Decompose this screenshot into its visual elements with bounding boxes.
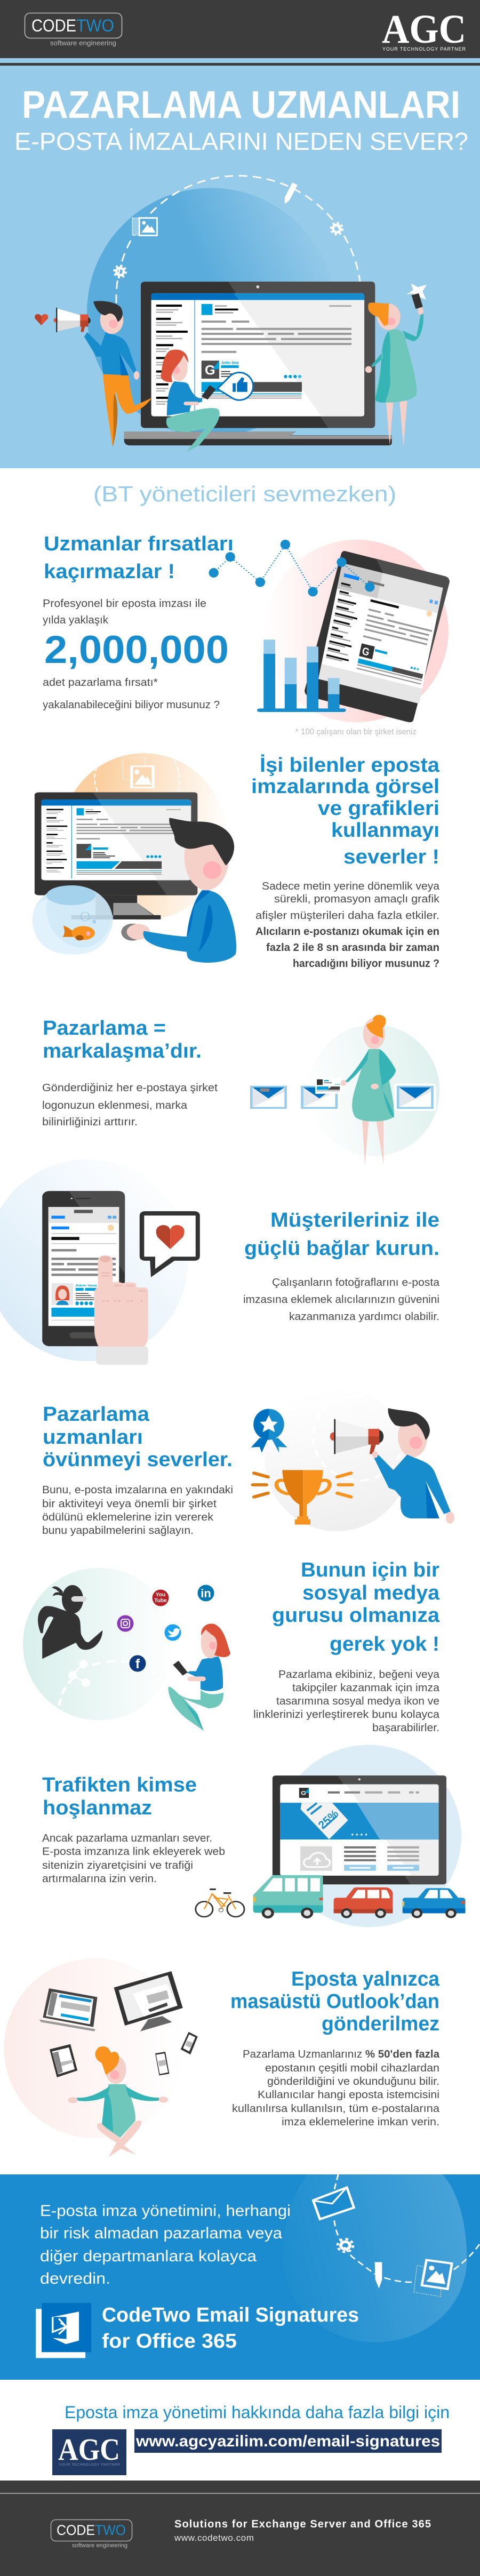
body text <box>42 1833 225 1885</box>
illustration: ninja, social icons, woman <box>23 1568 230 1731</box>
icon: ribbon badge <box>251 1409 287 1453</box>
heading: Pazarlama <box>43 1403 150 1426</box>
panel message: E-posta imza yönetimini, herhangi <box>40 2202 291 2220</box>
monitor <box>273 1775 446 1884</box>
icon: tablet <box>50 2044 77 2077</box>
heading: kullanmayı <box>331 819 439 842</box>
sitting woman <box>161 349 253 452</box>
footer text <box>174 2518 431 2543</box>
panel message: bir risk almadan pazarlama veya <box>40 2225 282 2242</box>
bar chart <box>257 639 346 712</box>
signature block <box>77 844 162 871</box>
heading: gurusu olmanıza <box>272 1604 440 1627</box>
body text <box>43 598 220 711</box>
icon: Instagram <box>117 1615 133 1632</box>
panel message: devredin. <box>40 2270 110 2287</box>
heading: sosyal medya <box>302 1582 440 1604</box>
heading: övünmeyi severler. <box>43 1449 233 1471</box>
woman <box>341 1015 396 1165</box>
icon: gear right <box>331 223 342 235</box>
CodeTwo logo: TWO <box>95 2522 126 2538</box>
tablet <box>305 551 450 722</box>
icon: YouTube <box>153 1589 169 1606</box>
body text: Kullanıcılar hangi eposta istemcisini <box>258 2089 439 2101</box>
heading: Pazarlama = <box>43 1017 166 1039</box>
icon: Facebook: f <box>135 1657 140 1671</box>
heading <box>244 1209 439 1260</box>
icon: Twitter <box>164 1625 181 1641</box>
icon: LinkedIn <box>197 1585 214 1601</box>
icon: gear left <box>114 266 126 277</box>
icon: envelope 2 <box>299 1084 340 1111</box>
icon: trophy <box>253 1470 352 1525</box>
body text: tasarımına sosyal medya ikon ve <box>276 1695 439 1707</box>
AGC box: AGC <box>58 2432 120 2467</box>
heading <box>42 1774 197 1819</box>
icon: goldfish <box>62 925 95 940</box>
panel message: diğer departmanlara kolayca <box>40 2247 257 2265</box>
body text <box>42 1082 218 1128</box>
icon: image <box>123 758 153 787</box>
icon: phone 1 <box>155 2052 169 2075</box>
body text <box>255 881 440 970</box>
body text: logonuzun eklenmesi, marka <box>42 1100 188 1111</box>
heading: ve grafikleri <box>318 797 439 820</box>
illustration: website and vehicles <box>196 1745 465 1927</box>
heading: Bunun için bir <box>301 1559 439 1581</box>
panel message <box>40 2202 291 2287</box>
heading: gerek yok ! <box>330 1633 439 1655</box>
decoration: circle with icons <box>36 2174 480 2358</box>
signature block <box>202 360 302 394</box>
body text <box>232 2049 440 2128</box>
illustration: awards and megaphone <box>251 1387 454 1531</box>
heading: kaçırmazlar ! <box>44 561 175 583</box>
signature card <box>315 1078 342 1094</box>
heading: gönderilmez <box>322 2013 439 2035</box>
body text: Gönderdiğiniz her e-postaya şirket <box>42 1082 218 1094</box>
body text: yakalanabileceğini biliyor musunuz ? <box>43 699 220 711</box>
body text: Alıcıların e-postanızı okumak için en <box>255 926 439 938</box>
signature block: John Doe <box>221 360 239 365</box>
hero panel <box>0 58 480 468</box>
body text: artırmalarına izin verin. <box>42 1873 157 1885</box>
phone <box>42 1191 125 1346</box>
more info line: Eposta imza yönetimi hakkında daha fazla bilgi için <box>65 2403 450 2422</box>
CodeTwo logo: CODE <box>57 2522 95 2538</box>
discount label: 25% <box>316 1807 341 1831</box>
body text: sürekli, promasyon amaçlı grafik <box>274 893 440 905</box>
section: social media <box>23 1559 440 1734</box>
product name <box>102 2304 359 2353</box>
body text: afişler müşterileri daha fazla etkiler. <box>255 910 439 922</box>
body text: başarabilirler. <box>372 1722 439 1734</box>
icon: blue car <box>403 1888 465 1918</box>
body text: Ancak pazarlama uzmanları sever. <box>42 1833 212 1844</box>
body text: fazla 2 ile 8 sn arasında bir zaman <box>266 942 439 954</box>
icon: desktop monitor <box>114 1971 183 2031</box>
URL box: www.agcyazilim.com/email-signatures <box>135 2433 440 2450</box>
heading: güçlü bağlar kurun. <box>244 1237 439 1260</box>
photo signature: Adele Vann <box>76 1284 97 1287</box>
illustration: phone, hand and heart bubble <box>0 1159 200 1365</box>
icon: gear <box>338 2239 353 2252</box>
icon: envelope 3 <box>394 1084 436 1111</box>
section: traffic <box>42 1745 465 1927</box>
speech bubble with heart <box>140 1211 200 1277</box>
icon: heart <box>35 314 48 325</box>
body text: ödülünü eklemelerine izin vererek <box>42 1511 214 1523</box>
heading: masaüstü Outlook’dan <box>230 1990 439 2013</box>
body text: epostanın çeşitli mobil cihazlardan <box>265 2062 439 2074</box>
CodeTwo logo <box>51 2519 132 2549</box>
body text: takipçiler kazanmak için imza <box>292 1682 440 1694</box>
header bar <box>0 0 480 58</box>
body text: Bunu, e-posta imzalarına en yakındaki <box>42 1484 233 1496</box>
big number: 2,000,000 <box>44 628 229 671</box>
heading <box>43 1017 202 1062</box>
heading <box>230 1968 440 2035</box>
footer <box>0 2481 480 2576</box>
body text: bilinirliğinizi arttırır. <box>42 1116 138 1128</box>
AGC logo: AGC <box>382 7 466 52</box>
icon: flash star <box>406 284 427 299</box>
CodeTwo logo: TWO <box>76 16 114 35</box>
body text <box>42 1484 233 1537</box>
section: branding <box>42 1015 439 1165</box>
section: opportunities <box>43 533 450 737</box>
heading: severler ! <box>343 846 439 868</box>
icon: phone 2 <box>181 2032 198 2054</box>
section: visuals <box>33 753 440 970</box>
icon: image <box>414 2260 452 2297</box>
hero illustration <box>35 176 427 452</box>
tablet and chart illustration <box>209 540 450 722</box>
product name: CodeTwo Email Signatures <box>102 2304 359 2326</box>
product icon <box>36 2303 91 2358</box>
section: bragging <box>42 1387 454 1537</box>
AGC box: YOUR TECHNOLOGY PARTNER <box>59 2463 120 2467</box>
icon: van <box>253 1875 323 1918</box>
CodeTwo logo: software engineering <box>72 2542 127 2549</box>
body text: imzasına eklemek alıcılarınızın güvenini <box>243 1294 439 1306</box>
heading: uzmanları <box>43 1426 143 1449</box>
CodeTwo logo <box>25 13 122 47</box>
heading <box>251 754 440 868</box>
tablet: G <box>361 645 371 658</box>
icon: LinkedIn: in <box>201 1587 211 1600</box>
photo signature <box>51 1283 98 1305</box>
dotted line chart <box>209 540 375 596</box>
heading: Müşterileriniz ile <box>270 1209 439 1231</box>
icon: thumbs up bubble <box>218 372 253 400</box>
icon: YouTube: Tube <box>154 1598 167 1604</box>
body text: Pazarlama ekibiniz, beğeni veya <box>278 1669 440 1681</box>
icon: image <box>132 218 157 235</box>
AGC box <box>52 2429 126 2475</box>
body text: E-posta imzanıza link ekleyerek web <box>42 1846 225 1858</box>
body text: harcadığını biliyor musunuz ? <box>293 958 439 970</box>
heading: İşi bilenler eposta <box>260 754 440 777</box>
icon: laptop <box>39 1988 98 2031</box>
body text: Çalışanların fotoğraflarını e-posta <box>272 1277 440 1289</box>
body text: linklerinizi yerleştirerek bunu kolayca <box>253 1709 440 1721</box>
icon: Facebook <box>129 1655 146 1671</box>
body text: imza eklemelerine imkan verin. <box>282 2116 439 2128</box>
heading: imzalarında görsel <box>251 775 439 798</box>
woman <box>169 1623 230 1731</box>
body text <box>253 1669 440 1734</box>
icon: envelope <box>313 2187 354 2219</box>
illustration: devices and juggling woman <box>4 1958 198 2157</box>
heading: Trafikten kimse <box>42 1774 197 1796</box>
heading: hoşlanmaz <box>43 1797 152 1819</box>
fishbowl <box>33 885 113 955</box>
man from behind <box>121 818 236 963</box>
heading <box>44 533 234 583</box>
call to action panel <box>0 2174 480 2380</box>
product name: for Office 365 <box>102 2330 237 2353</box>
monitor: G <box>301 1789 306 1796</box>
tagline: (BT yöneticileri sevmezken) <box>93 482 396 506</box>
illustration: woman with envelopes <box>250 1015 439 1165</box>
heading: Uzmanlar fırsatları <box>44 533 234 555</box>
signature block: G <box>205 363 215 378</box>
section: customer bonds <box>0 1159 440 1365</box>
icon: envelope 1 <box>250 1086 287 1109</box>
icon: megaphone <box>330 1419 383 1454</box>
body text: Pazarlama Uzmanlarınız % 50'den fazla <box>243 2049 440 2060</box>
CodeTwo logo: CODE <box>31 16 76 35</box>
footnote: * 100 çalışanı olan bir şirket iseniz <box>295 727 417 737</box>
body text: Sadece metin yerine dönemlik veya <box>262 881 440 892</box>
body text: yılda yaklaşık <box>43 614 109 626</box>
icon: share <box>68 1660 90 1687</box>
standing woman <box>365 284 427 446</box>
body text: kullanılırsa kullanılsın, tüm e-postalarına <box>232 2103 440 2115</box>
icon: bicycle <box>196 1889 244 1917</box>
icon: YouTube: You <box>156 1592 165 1598</box>
woman <box>68 2046 168 2157</box>
body text: sitenizin ziyaretçisini ve trafiği <box>42 1860 193 1871</box>
heading: markalaşma’dır. <box>43 1040 202 1062</box>
body text: kazanmanıza yardımcı olabilir. <box>289 1311 439 1323</box>
ninja <box>38 1585 102 1659</box>
illustration: monitor, man and fishbowl <box>33 753 236 963</box>
icon: red car <box>334 1887 393 1918</box>
subtitle: E-POSTA İMZALARINI NEDEN SEVER? <box>14 127 468 155</box>
heading: Eposta yalnızca <box>291 1968 440 1990</box>
heading <box>272 1559 440 1655</box>
icon: pencil <box>285 182 298 204</box>
icon: megaphone <box>53 308 91 332</box>
body text: bir aktiviteyi veya önemli bir şirket <box>42 1498 217 1510</box>
heading <box>43 1403 233 1471</box>
man with megaphone <box>35 301 151 447</box>
laptop <box>124 282 392 445</box>
body text: gönderildiğini ve okunduğunu bilir. <box>267 2076 439 2087</box>
man <box>372 1408 454 1524</box>
body text: Profesyonel bir eposta imzası ile <box>43 598 206 610</box>
CodeTwo logo: software engineering <box>50 39 116 47</box>
icon: pencil <box>375 2262 382 2289</box>
body text <box>243 1277 440 1323</box>
monitor <box>35 793 197 919</box>
AGC logo: YOUR TECHNOLOGY PARTNER <box>382 46 466 52</box>
footer text: Solutions for Exchange Server and Office 365 <box>174 2518 431 2530</box>
section: mobile <box>4 1958 440 2157</box>
footer text: www.codetwo.com <box>174 2533 254 2543</box>
hand <box>94 1255 148 1365</box>
body text: adet pazarlama fırsatı* <box>43 677 158 689</box>
body text: bunu yapabilmelerini sağlayın. <box>42 1525 194 1537</box>
